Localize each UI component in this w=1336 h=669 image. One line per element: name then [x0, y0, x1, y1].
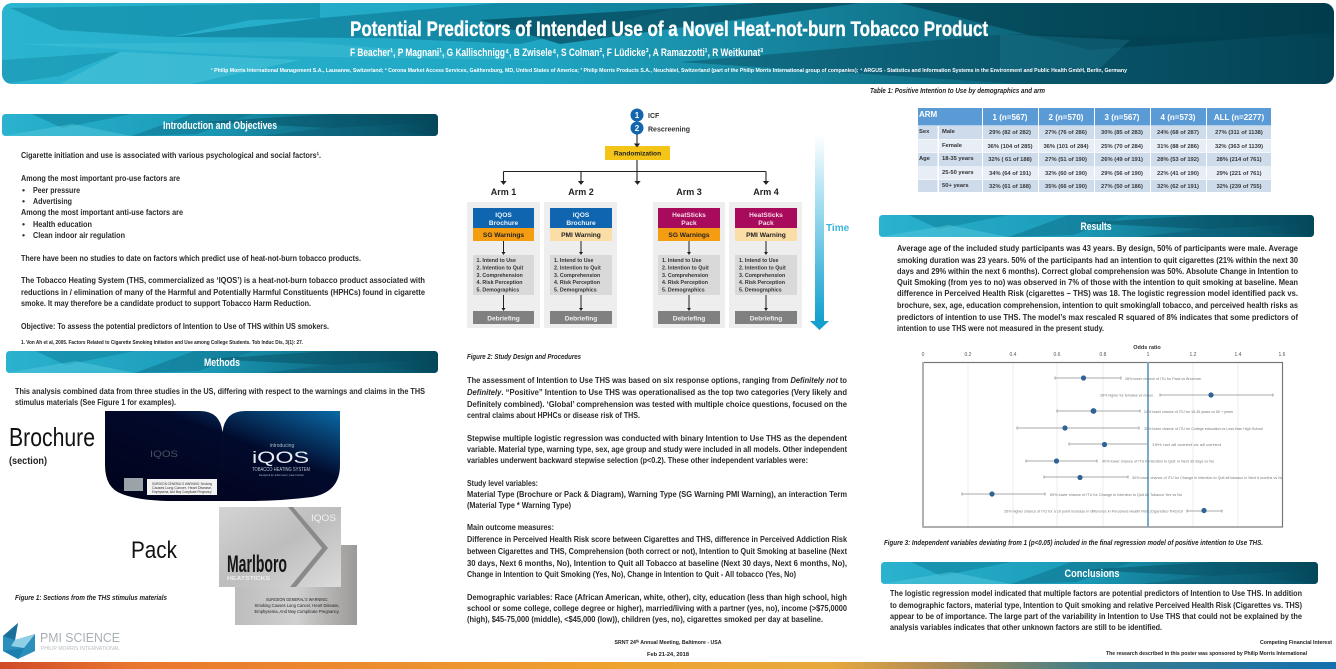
table: positive intention: 31% (88 of 286) [1157, 144, 1199, 150]
arm 3: SG Warnings [668, 232, 710, 239]
image: pack back: Emphysema, And May Complicate Pregnancy. [254, 609, 340, 615]
text block: methods detail: (high), $45-75,000 (middle), <$45,000 (low)), children (yes, no), cigarettes smoked per day at baseline. [467, 614, 823, 624]
text block: introduction: Among the most important anti-use factors are [21, 207, 183, 217]
arm 3: 2. Intention to Quit [662, 266, 709, 272]
image: brochure: introducing [270, 443, 294, 449]
text block: introduction: 1. Von Ah et al, 2005. Factors Related to Cigarette Smoking Initiation and Use among College Students. Tob Induc Dis, 3(1): 27. [21, 340, 303, 346]
panel: introduction heading [2, 114, 438, 136]
chart: odds ratio forest plot: 69% lower chance of ITU for Change in Intention to Quit All Tobacco Yes vs No [1050, 493, 1182, 497]
label: pack: Pack [131, 537, 178, 564]
image: brochure: TOBACCO HEATING SYSTEM [252, 467, 310, 473]
image: brochure: SURGEON GENERAL'S WARNING: Smoking [152, 482, 212, 486]
text block: conclusions [890, 588, 1302, 632]
image: brochure [105, 411, 340, 501]
text block: introduction: • [22, 230, 25, 240]
arm 1: SG Warnings [483, 232, 524, 239]
arm 2: Arm 2 [568, 187, 594, 197]
competing interest note: The research described in this poster was sponsored by Philip Morris International [1106, 651, 1307, 657]
caption: figure 1: Figure 1: Sections from the THS stimulus materials [15, 593, 167, 602]
table: positive intention: 2 (n=570) [1049, 113, 1084, 122]
arm 1: 2. Intention to Quit [476, 266, 524, 272]
chart: odds ratio forest plot: 24% lower chance of ITU for 18-35 years vs 50 + years [1144, 410, 1233, 414]
chart: odds ratio forest plot: 0.2 [965, 352, 972, 358]
chart: odds ratio forest plot [922, 345, 1286, 527]
text block: introduction: Advertising [33, 196, 72, 206]
chart: odds ratio forest plot: 35% lower chance of ITU for College education vs Less than High School [1144, 427, 1263, 431]
table: positive intention: 28% (214 of 761) [1216, 157, 1262, 163]
arm 4: PMI Warning [746, 232, 786, 239]
arm 2: 1. Intend to Use [554, 258, 593, 264]
arm 1: Brochure [489, 220, 518, 227]
chart: odds ratio forest plot: 19% not all correct vs all correct [1152, 443, 1221, 447]
arm 3: 3. Comprehension [662, 273, 708, 279]
arm 1: Debriefing [487, 316, 520, 322]
panel: introduction heading: Introduction and Objectives [163, 120, 277, 132]
table: positive intention: 36% (101 of 284) [1043, 144, 1089, 150]
authors: F Beacher¹, P Magnani¹, G Kallischnigg⁴, B Zwisele⁴, S Colman², F Lüdicke³, A Ramazzotti¹, R Weitkunat³ [350, 47, 763, 59]
image: brochure: iQOS [252, 448, 309, 467]
chart: odds ratio forest plot: 0 [922, 352, 925, 358]
arm 3: Debriefing [673, 316, 705, 322]
label: brochure: (section) [9, 456, 47, 467]
table: positive intention: 3 (n=567) [1105, 113, 1140, 122]
table: positive intention: 25-50 years [942, 170, 974, 176]
text block: methods detail: school or some college, college degree or higher), married/living with a partner (yes, no), income (>$75,0000 [467, 603, 847, 613]
text block: methods intro: stimulus materials (See Figure 1 for examples). [15, 397, 176, 407]
arm 1: 3. Comprehension [476, 273, 523, 279]
arm 1: 1. Intend to Use [476, 258, 516, 264]
table: positive intention: 50+ years [942, 183, 969, 189]
step 2 rescreening: Rescreening [648, 126, 690, 134]
text block: methods intro: This analysis combined data from three studies in the US, differing with respect to the warnings and claims in the THS [15, 386, 425, 396]
text block: introduction: • [22, 185, 25, 195]
panel: results heading: Results [1080, 221, 1112, 233]
arm 2: Brochure [566, 220, 596, 227]
title: Potential Predictors of Intended Use of a Novel Heat-not-burn Tobacco Product [350, 18, 988, 41]
table: positive intention: 24% (68 of 287) [1157, 130, 1199, 136]
arm 3: Arm 3 [676, 187, 702, 197]
table: positive intention: 27% (50 of 186) [1101, 184, 1143, 190]
arm 1: 4. Risk Perception [476, 280, 522, 286]
text block: methods intro [15, 386, 425, 407]
table: positive intention: 29% (56 of 190) [1101, 171, 1143, 177]
table: positive intention: ARM [919, 110, 938, 119]
label: brochure: Brochure [9, 422, 95, 452]
arrow: time [810, 135, 850, 330]
image: brochure: IQOS [150, 449, 178, 459]
randomization box: Randomization [614, 150, 661, 158]
text block: introduction: • [22, 196, 25, 206]
header banner [2, 3, 1334, 84]
meeting info [614, 640, 722, 658]
text block: introduction: • [22, 219, 25, 229]
logo: PMI Science: PMI SCIENCE [40, 630, 120, 645]
arm 2 [544, 187, 617, 328]
table: positive intention: 27% (51 of 190) [1045, 157, 1087, 163]
text block: methods detail: Material Type (Brochure or Pack & Diagram), Warning Type (SG Warning PMI Warning), an interaction Term [467, 489, 847, 499]
text block: methods detail: Difference in Perceived Health Risk score between Cigarettes and THS, difference in Perceived Addiction Risk [467, 534, 847, 544]
table: positive intention: 29% (221 of 761) [1216, 171, 1262, 177]
chart: odds ratio forest plot: 28% higher for females vs males [1100, 394, 1153, 398]
arm 2: 3. Comprehension [554, 273, 600, 279]
text block: methods detail [467, 375, 847, 624]
chart: odds ratio forest plot: 1 [1147, 352, 1150, 358]
caption: figure 3: Figure 3: Independent variables deviating from 1 (p<0.05) included in the final regression model of positive intention to Use THS. [884, 538, 1263, 547]
arm 2: 4. Risk Perception [554, 280, 600, 286]
table: positive intention: 29% (82 of 282) [989, 130, 1031, 136]
panel: conclusions heading [881, 562, 1318, 584]
table: positive intention: 30% (85 of 283) [1101, 130, 1143, 136]
table: positive intention: 32% ( 61 of 188) [988, 157, 1032, 163]
table: positive intention: 28% (53 of 192) [1157, 157, 1199, 163]
table: positive intention: Male [942, 129, 956, 135]
text block: introduction: Health education [33, 219, 92, 229]
arm 4: 3. Comprehension [739, 273, 785, 279]
arm 1: 5. Demographics [476, 288, 519, 294]
step 2 rescreening [630, 122, 690, 134]
logo: PMI Science: PHILIP MORRIS INTERNATIONAL [41, 646, 120, 652]
table: positive intention: 35% (66 of 190) [1045, 184, 1087, 190]
text block: results [897, 243, 1298, 333]
label: brochure [9, 422, 95, 467]
chart: odds ratio forest plot: 0.6 [1054, 352, 1061, 358]
step 1 ICF: ICF [648, 113, 660, 120]
arm 3 [653, 187, 725, 328]
caption: figure 2: Figure 2: Study Design and Procedures [467, 352, 581, 361]
text block: introduction: The Tobacco Heating System (THS, commercialized as ‘IQOS’) is a heat-not-burn tobacco product associated with [21, 275, 425, 285]
text block: introduction: Among the most important pro-use factors are [21, 173, 180, 183]
text block: methods detail: Study level variables: [467, 478, 538, 488]
arm 3: Pack [681, 220, 697, 227]
step 1 ICF [630, 108, 660, 122]
arm 4: Arm 4 [753, 187, 779, 197]
table: positive intention: 34% (64 of 191) [989, 171, 1031, 177]
image: pack back [235, 545, 357, 625]
table: positive intention: 18-35 years [942, 156, 974, 162]
image: pack front: Marlboro [227, 551, 287, 578]
text block: methods detail: central claims about HPHCs or disease risk of THS. [467, 410, 640, 420]
chart: odds ratio forest plot: 1.4 [1235, 352, 1242, 358]
table: positive intention: ALL (n=2277) [1214, 113, 1264, 122]
chart: odds ratio forest plot: 30% lower chance of ITU for Change in Intention to Quit all tobacco in Next 6 months vs No [1132, 476, 1283, 480]
panel: results heading [879, 215, 1314, 237]
arm 2: 2. Intention to Quit [554, 266, 601, 272]
arm 2: PMI Warning [561, 232, 601, 239]
text block: introduction: Cigarette initiation and use is associated with various psychological and social factors¹. [21, 150, 321, 160]
competing interest note: Competing Financial Interest [1260, 640, 1332, 646]
image: pack front: HEATSTICKS [227, 576, 271, 582]
text block: methods detail: Demographic variables: Race (African American, white, other), city, education (less than high school, high [467, 592, 847, 602]
image: brochure: Causes Lung Cancer, Heart Disease, [152, 486, 212, 490]
text block: introduction: reductions in / elimination of many of the Harmful and Potentially Harmful Constituents (HPHCs) found in cigarette [21, 287, 425, 297]
image: pack front [219, 507, 341, 587]
connectors [502, 134, 768, 184]
arm 3: 5. Demographics [662, 288, 705, 294]
text block: introduction: smoke. It may therefore be a candidate product to support Tobacco Harm Reduction. [21, 298, 311, 308]
arrow: time: Time [826, 223, 850, 234]
chart: odds ratio forest plot: 28% lower chance of ITU for Pack vs Brochure [1125, 377, 1201, 381]
text block: methods detail: variables underwent backward stepwise selection (p<0.2). These other independent variables were: [467, 455, 808, 465]
text block: methods detail: Main outcome measures: [467, 522, 554, 532]
arm 4: 1. Intend to Use [739, 258, 778, 264]
text block: methods detail: 30 days, Next 6 months, No), Intention to Quit all Tobacco at baseline (Next 30 days, Next 6 months, No), [467, 558, 847, 568]
caption: table 1: Table 1: Positive Intention to Use by demographics and arm [870, 86, 1045, 95]
text block: methods detail: Change in Intention to Quit Smoking (Yes, No), Change in Intention to Quit - All tobacco (Yes, No) [467, 569, 796, 579]
table: positive intention: 27% (311 of 1138) [1215, 130, 1263, 136]
text block: introduction: There have been no studies to date on factors which predict use of heat-not-burn tobacco products. [21, 253, 361, 263]
text block: methods detail: Definitely. “Positive” Intention to Use THS was operationalised as the top two categories (Very likely and [467, 387, 847, 397]
arm 4: HeatSticks [749, 212, 783, 219]
table: positive intention: 1 (n=567) [993, 113, 1028, 122]
panel: methods heading [6, 351, 438, 373]
panel: methods heading: Methods [204, 357, 240, 369]
text block: conclusions: analysis variables indicates that other unknown factors are still to be identified. [890, 622, 1162, 632]
table: positive intention: 26% (49 of 191) [1101, 157, 1143, 163]
table: positive intention [918, 108, 1271, 192]
step 1 ICF: 1 [635, 111, 640, 120]
table: positive intention: 25% (70 of 284) [1101, 144, 1143, 150]
table: positive intention: 4 (n=573) [1161, 113, 1196, 122]
arm 4 [729, 187, 802, 328]
table: positive intention: 32% (61 of 188) [989, 184, 1031, 190]
text block: introduction: Peer pressure [33, 185, 80, 195]
text block: methods detail: (Material Type * Warning Type) [467, 500, 571, 510]
chart: odds ratio forest plot: 1.2 [1190, 352, 1197, 358]
table: positive intention: 27% (76 of 286) [1045, 130, 1087, 136]
image: brochure: Designed for adult users, heat it better [259, 473, 304, 477]
arm 4: 2. Intention to Quit [739, 266, 786, 272]
text block: introduction: Objective: To assess the potential predictors of Intention to Use of THS within US smokers. [21, 321, 329, 331]
flowchart: study design [467, 108, 850, 330]
arm 2: IQOS [573, 212, 590, 219]
arm 3: HeatSticks [672, 212, 706, 219]
image: pack back: SURGEON GENERAL'S WARNING: [266, 597, 328, 603]
arm 3: 4. Risk Perception [662, 280, 708, 286]
table: positive intention: Sex [919, 129, 930, 135]
competing interest note [1106, 640, 1332, 657]
arm 2: Debriefing [565, 316, 597, 322]
text block: introduction: Clean indoor air regulation [33, 230, 125, 240]
chart: odds ratio forest plot: Odds ratio [1133, 345, 1161, 351]
chart: odds ratio forest plot: 0.4 [1010, 352, 1017, 358]
image: pack front: IQOS [311, 513, 336, 523]
arm 4: 5. Demographics [739, 288, 782, 294]
arm 1: IQOS [495, 212, 512, 219]
table: positive intention: 32% (239 of 755) [1216, 184, 1262, 190]
chart: odds ratio forest plot: 26% higher chance of ITU for a 10 point increase in difference in Perceived Health Risk (Cigarettes-THS)/10 [1004, 510, 1183, 514]
randomization box [605, 146, 670, 160]
text block: methods detail: The assessment of Intention to Use THS was based on six response options, ranging from Definitely not to [467, 375, 847, 385]
table: positive intention: 22% (41 of 190) [1157, 171, 1199, 177]
arm 1: Arm 1 [491, 187, 516, 197]
text block: results: intention to use THS were not measured in the present study. [897, 323, 1104, 333]
step 2 rescreening: 2 [635, 124, 640, 133]
arm 4: 4. Risk Perception [739, 280, 785, 286]
arm 4: Pack [758, 220, 774, 227]
text block: methods detail: Stepwise multiple logistic regression was conducted with binary Intention to Use THS as the dependent [467, 433, 847, 443]
table: positive intention: 36% (104 of 285) [987, 144, 1033, 150]
footer colour band [0, 662, 1336, 669]
text block: methods detail: Definitely combined). ‘Global’ comprehension was tested with multiple choice questions, focused on the [467, 399, 847, 409]
chart: odds ratio forest plot: 40% lower chance of ITU if Intention to Quit: in Next 30 days vs No [1102, 460, 1214, 464]
image: pack back: Smoking Causes Lung Cancer, Heart Disease, [254, 603, 340, 609]
arm 3: 1. Intend to Use [662, 258, 701, 264]
affiliations: ¹ Philip Morris International Management S.A., Lausanne, Switzerland; ² Corona Market Access Services, Gaithersburg, MD, United States of America; ³ Philip Morris Products S.A., Neuchâtel, Switzerland (part of the Philip Morris International group of companies); ⁴ ARGUS - Statistics and Information Systems in the Environment and Public Health GmbH, Berlin, Germany [211, 67, 1128, 74]
text block: introduction [21, 150, 425, 346]
text block: methods detail: between Cigarettes and THS, Comprehension (both correct or not), Intention to Quit Smoking at baseline (Next [467, 546, 847, 556]
chart: odds ratio forest plot: 0.8 [1100, 352, 1107, 358]
table: positive intention: 32% (60 of 190) [1045, 171, 1087, 177]
arm 1 [467, 187, 540, 328]
table: positive intention: 32% (62 of 191) [1157, 184, 1199, 190]
logo: PMI Science [3, 623, 120, 659]
image: brochure: Emphysema, And May Complicate Pregnancy. [152, 490, 212, 494]
meeting info: Feb 21-24, 2018 [647, 652, 689, 658]
table: positive intention: Age [919, 156, 931, 162]
panel: conclusions heading: Conclusions [1064, 568, 1120, 580]
arm 2: 5. Demographics [554, 288, 597, 294]
text block: methods detail: variable. Material type, warning type, sex, age group and study were included in all models. Other independent [467, 444, 847, 454]
arm 4: Debriefing [750, 316, 782, 322]
meeting info: SRNT 24ᵗʰ Annual Meeting, Baltimore - USA [614, 640, 722, 646]
table: positive intention: 32% (363 of 1139) [1215, 144, 1263, 150]
chart: odds ratio forest plot: 1.6 [1279, 352, 1286, 358]
table: positive intention: Female [942, 143, 963, 149]
